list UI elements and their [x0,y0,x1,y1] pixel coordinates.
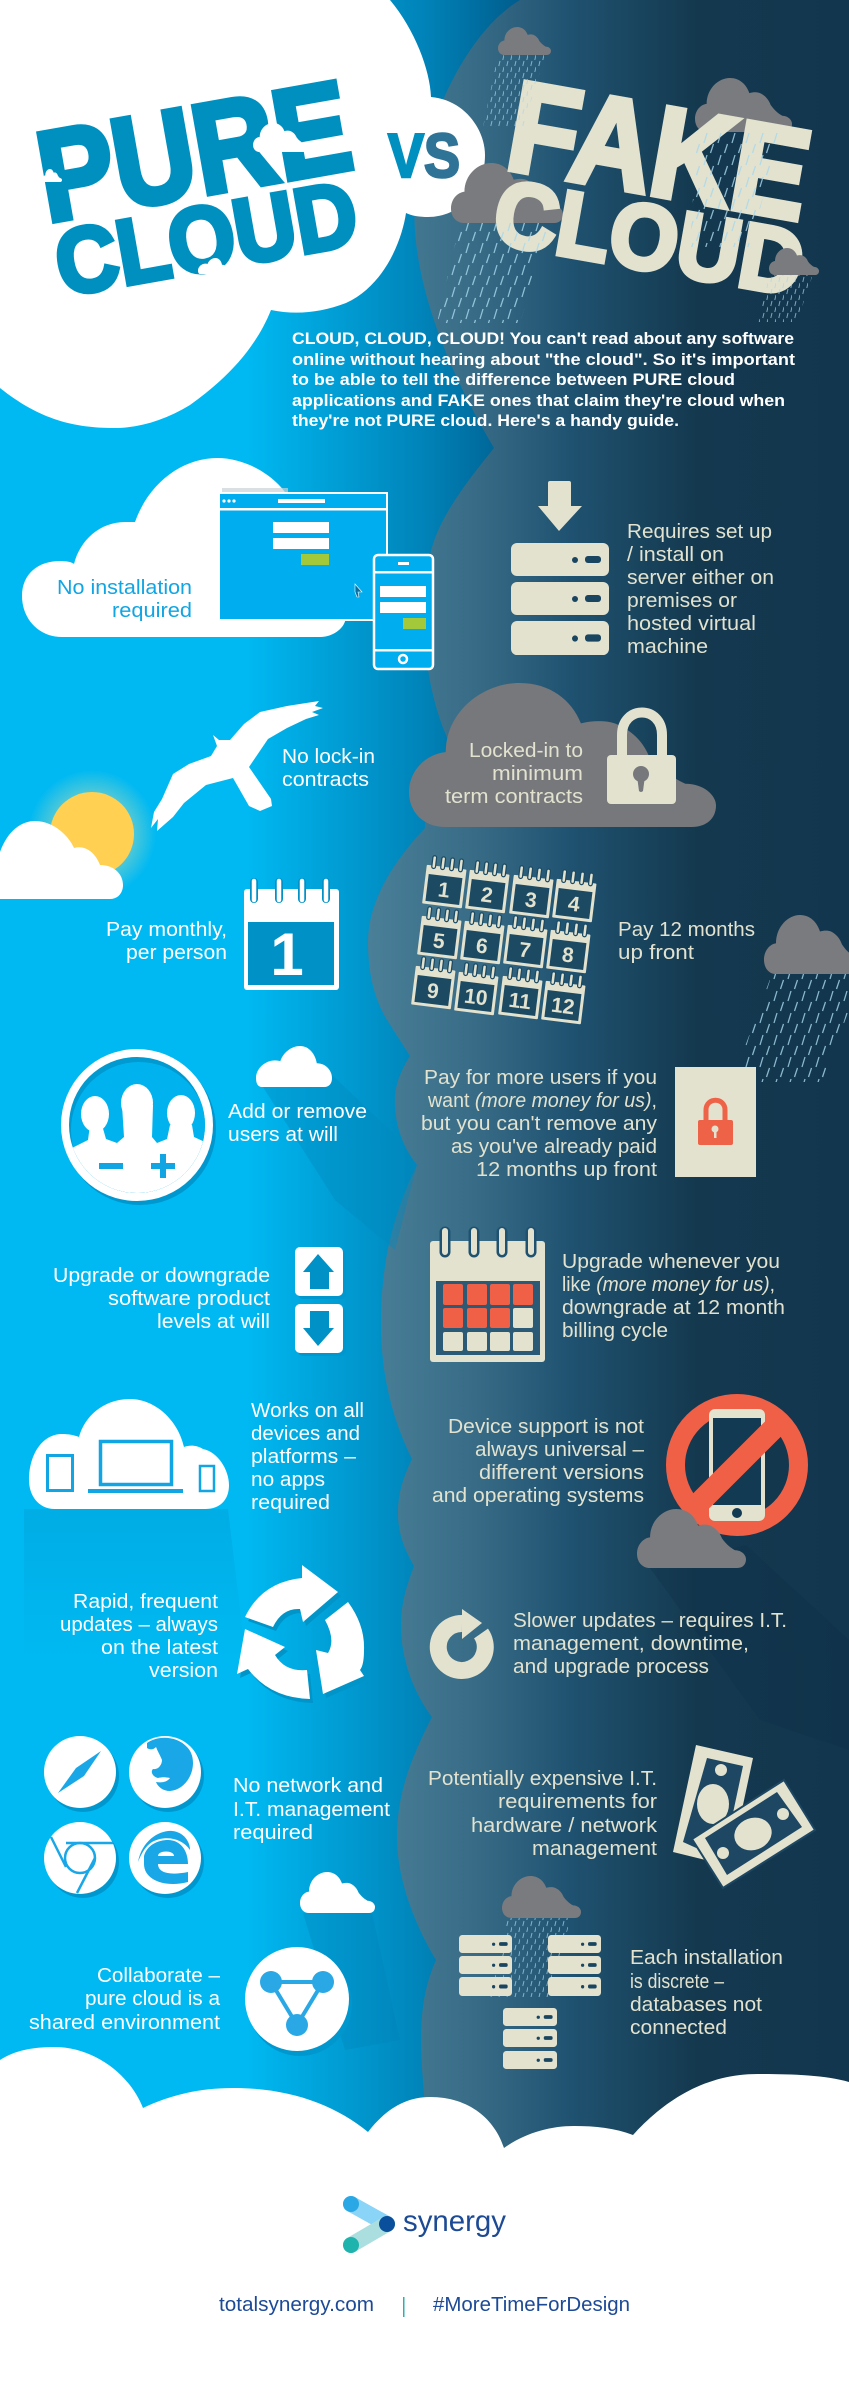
text: no installation required [57,577,192,622]
icon: rain from right edge cloud [740,974,849,1082]
icon: twelve month calendars: 6 [475,934,489,959]
text: slower updates: management, downtime, [513,1633,749,1655]
intro text block [292,329,795,430]
text: slower updates [513,1610,787,1678]
text: requires set up: Requires set up [627,521,772,543]
text: no installation required: No installation [57,577,192,599]
title: PURE CLOUD: PURE [27,54,361,250]
text: no network: required [233,1822,313,1844]
text: requires set up: premises or [627,590,737,612]
title: PURE CLOUD [27,54,365,316]
text: locked-in to minimum term contracts: minimum [492,763,583,785]
text: no network: No network and [233,1775,383,1797]
intro text block: CLOUD, CLOUD, CLOUD! You can't read about any software [292,329,794,348]
text: upgrade whenever you like [562,1251,785,1342]
top white title cloud [0,0,485,428]
text: pay for more users: 12 months up front [476,1159,657,1181]
text: no network [233,1775,390,1844]
icon: rain on servers [490,1918,571,1997]
icon: padlock [607,712,676,804]
icon: single month calendar: 1 [270,921,304,988]
text: requires set up: server either on [627,567,774,589]
icon: grey cloud over servers [502,1876,581,1918]
title: VS: VS [388,122,460,191]
text: slower updates: Slower updates – requires I.T. [513,1610,787,1632]
icon: sun [50,792,134,876]
text: device support: different versions [479,1462,644,1484]
icon: up and down arrow tiles [295,1247,346,1356]
text: each installation: is discrete – [630,1971,725,1993]
icon: banknotes [673,1745,815,1888]
icon: edge [129,1822,204,1898]
text: upgrade whenever you like: downgrade at 12 month [562,1297,785,1319]
text: potentially expensive: hardware / network [471,1815,658,1837]
text: potentially expensive [428,1768,658,1860]
icon: shadow of second white cloud [303,1913,400,2050]
footer: website: totalsynergy.com [219,2294,374,2316]
text: no installation required: required [112,600,192,622]
footer: hashtag: #MoreTimeForDesign [433,2294,630,2316]
text: works on all devices: required [251,1492,330,1514]
text: collaborate [29,1965,221,2034]
background: fake cloud side [368,0,849,2170]
text: works on all devices: Works on all [251,1400,364,1422]
icon: grey cloud below phone [637,1509,746,1568]
icon: browser window [218,488,388,620]
text: no lock-in contracts: contracts [282,769,369,791]
text: add or remove users: users at will [228,1124,338,1146]
text: pay 12 months up front [618,919,755,964]
icon: grey cloud at right edge [764,915,849,974]
icon: white installation cloud [22,458,346,637]
text: works on all devices [251,1400,364,1514]
text: rapid updates: on the latest [101,1637,218,1659]
text: device support: always universal – [475,1439,645,1461]
text: no lock-in contracts: No lock-in [282,746,375,768]
text: potentially expensive: requirements for [498,1791,657,1813]
text: add or remove users: Add or remove [228,1101,367,1123]
text: works on all devices: devices and [251,1423,360,1445]
text: collaborate: shared environment [29,2012,220,2034]
icon: device cloud [29,1399,229,1509]
footer: divider [403,2297,404,2317]
text: each installation [630,1947,783,2039]
text: upgrade whenever you like: like (more money for us), [562,1274,775,1296]
icon: shared network circle [245,1947,352,2056]
icon: twelve month calendars: 10 [463,985,489,1010]
text: requires set up: hosted virtual [627,613,756,635]
logo: synergy wordmark: synergy [403,2205,506,2238]
text: pay for more users: Pay for more users if you [424,1067,657,1089]
text: potentially expensive: Potentially expensive I.T. [428,1768,657,1790]
text: pay monthly per person: Pay monthly, [106,919,227,941]
icon: small white cloud [256,1046,332,1087]
intro text block: online without hearing about "the cloud". So it's important [292,350,795,369]
text: pay monthly per person [106,919,227,964]
text: collaborate: Collaborate – [97,1965,221,1987]
text: works on all devices: platforms – [251,1446,357,1468]
title: FAKE CLOUD: CLOUD [487,161,811,316]
text: rapid updates: version [149,1660,218,1682]
icon: small grey cloud in front of title [769,248,819,275]
icon: shadow of small white cloud [263,1075,417,1250]
icon: cloud in front of sun [0,821,123,899]
icon: tablet, laptop and phone [48,1442,214,1493]
icon: recycle arrows [237,1565,367,1703]
icon: users circle [60,1049,216,1210]
icon: small white clouds biting title letters [43,123,309,274]
icon: single month calendar [244,881,339,990]
logo: synergy mark [343,2196,395,2253]
icon: twelve month calendars: 2 [480,883,494,908]
bottom white cloud [0,2047,849,2401]
text: rapid updates [60,1591,218,1682]
icon: grey lock-in cloud [409,683,716,827]
text: upgrade or downgrade: Upgrade or downgrade [53,1265,270,1287]
icon: rain under title clouds [437,55,813,323]
icon: second small white cloud [300,1872,375,1913]
icon: phone [373,555,433,669]
icon: bird [151,701,323,831]
text: upgrade or downgrade [53,1265,270,1333]
text: rapid updates: updates – always [60,1614,218,1636]
icon: twelve month calendars: 4 [567,892,581,917]
text: upgrade or downgrade: levels at will [157,1311,270,1333]
icon: twelve month calendars: 7 [518,938,532,963]
title: PURE CLOUD: CLOUD [48,162,365,316]
text: requires set up: / install on [627,544,724,566]
text: collaborate: pure cloud is a [85,1988,221,2010]
text: pay 12 months up front: up front [618,942,694,964]
icon: twelve month calendars: 8 [561,943,575,968]
text: each installation: connected [630,2017,727,2039]
text: device support: Device support is not [448,1416,644,1438]
icon: twelve month calendars: 11 [507,989,533,1014]
icon: twelve month calendars: 1 [437,878,451,903]
icon: disconnected server stacks [459,1935,601,2069]
text: each installation: Each installation [630,1947,783,1969]
icon: safari [44,1736,119,1812]
text: rapid updates: Rapid, frequent [73,1591,218,1613]
text: pay for more users [421,1067,657,1181]
text: slower updates: and upgrade process [513,1656,709,1678]
icon: shadow of grey cloud [650,1545,849,1750]
text: requires set up: machine [627,636,708,658]
text: each installation: databases not [630,1994,762,2016]
icon: sun glow [28,770,156,898]
text: upgrade whenever you like: Upgrade whenever you [562,1251,780,1273]
text: pay monthly per person: per person [126,942,227,964]
text: add or remove users [228,1101,367,1146]
icon: chrome [44,1822,119,1898]
intro text block: applications and FAKE ones that claim they're cloud when [292,391,785,410]
icon: shadow of device cloud [24,1509,246,1660]
icon: firefox [129,1736,204,1812]
icon: grey storm clouds behind title [451,27,792,223]
icon: slow update arrow [438,1609,485,1670]
text: pay for more users: as you've already paid [451,1136,657,1158]
icon: twelve month calendars [411,857,598,1024]
text: requires set up [627,521,774,658]
icon: twelve month calendars: 12 [550,994,576,1019]
text: upgrade or downgrade: software product [108,1288,270,1310]
title: FAKE CLOUD: FAKE [498,55,820,248]
text: locked-in to minimum term contracts [445,740,583,808]
intro text block: to be able to tell the difference between PURE cloud [292,370,735,389]
text: works on all devices: no apps [251,1469,325,1491]
title: FAKE CLOUD [487,55,820,316]
text: pay 12 months up front: Pay 12 months [618,919,755,941]
icon: prohibited phone [676,1404,798,1526]
text: locked-in to minimum term contracts: Locked-in to [469,740,583,762]
icon: twelve month calendars: 3 [524,888,538,913]
icon: billing calendar [430,1231,545,1362]
text: locked-in to minimum term contracts: term contracts [445,786,583,808]
text: pay for more users: want (more money for us), [427,1090,657,1112]
intro text block: they're not PURE cloud. Here's a handy guide. [292,411,679,430]
icon: locked card [675,1067,756,1177]
text: upgrade whenever you like: billing cycle [562,1320,668,1342]
icon: download arrow and server stack [511,481,609,655]
text: potentially expensive: management [532,1838,657,1860]
text: no lock-in contracts [282,746,375,791]
text: no network: I.T. management [233,1799,390,1821]
text: pay for more users: but you can't remove any [421,1113,657,1135]
text: device support: and operating systems [432,1485,644,1507]
icon: twelve month calendars: 9 [426,979,440,1004]
text: device support [432,1416,645,1507]
icon: twelve month calendars: 5 [432,929,446,954]
